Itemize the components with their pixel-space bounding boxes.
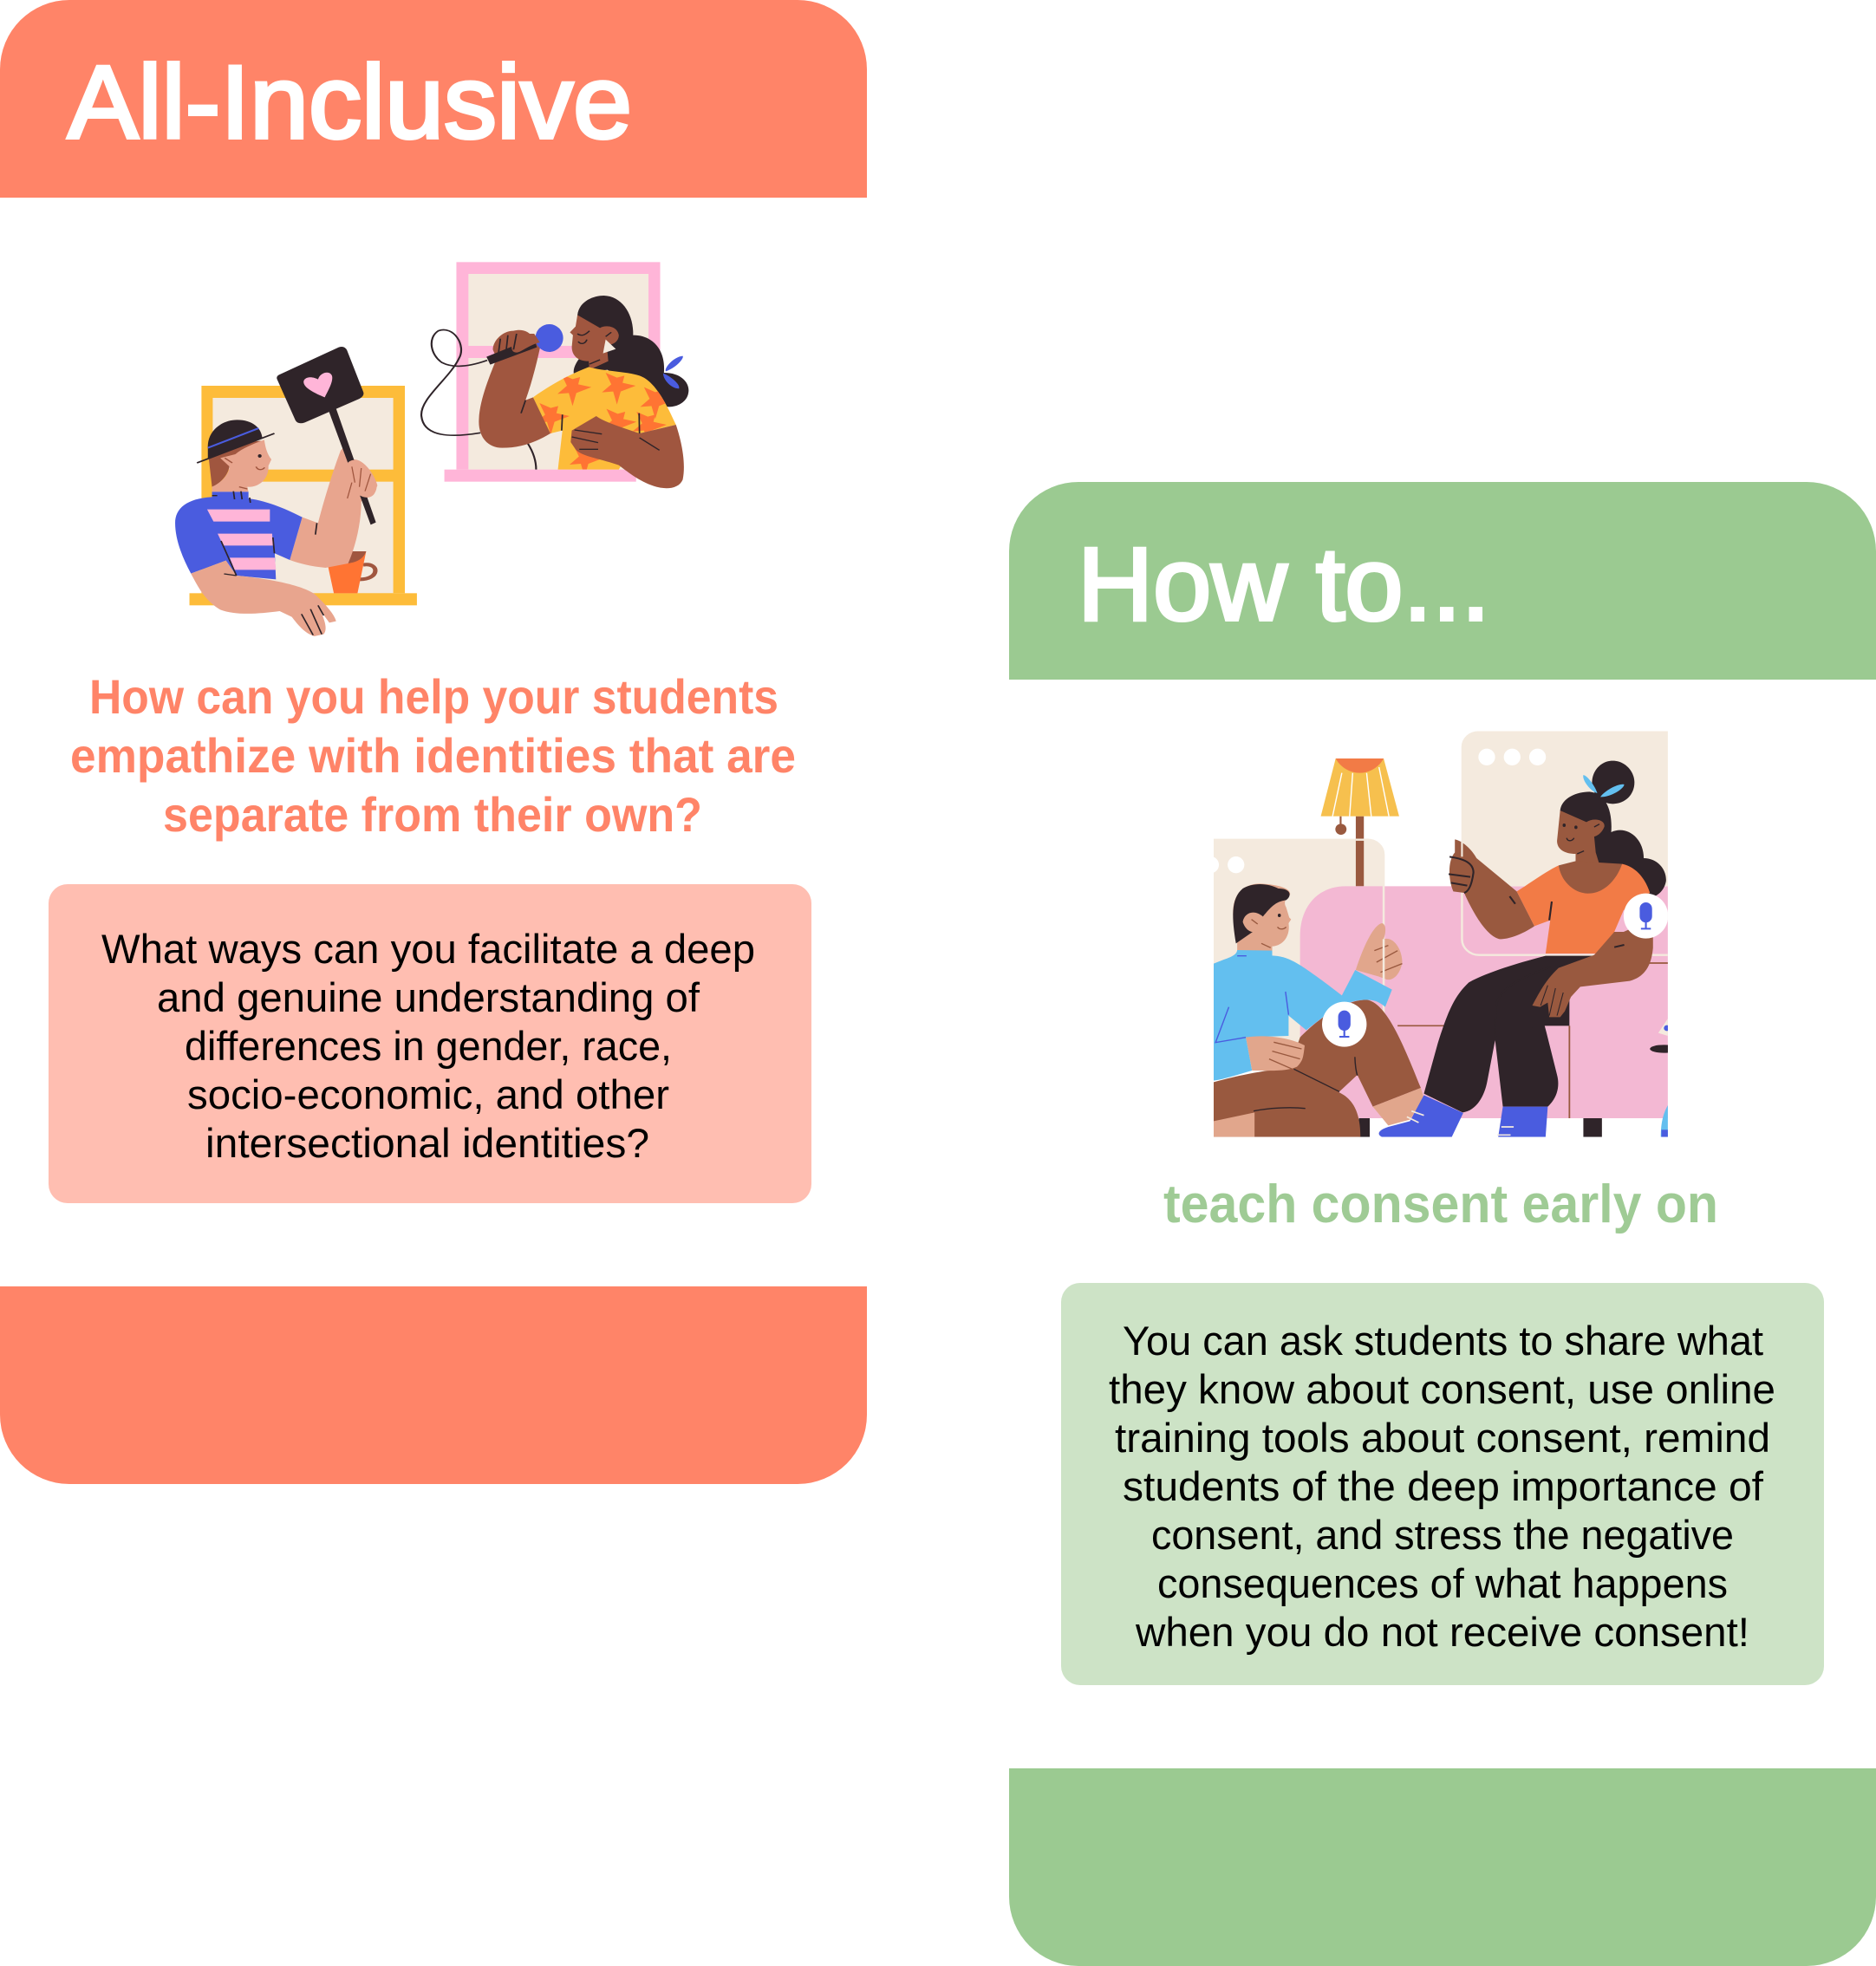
callout: how-to advice: You can ask students to share what: [1123, 1318, 1763, 1364]
callout: how-to advice: they know about consent, use online: [1109, 1366, 1775, 1412]
header banner: How to...: [1009, 482, 1876, 680]
floor lamp: [1321, 758, 1399, 886]
callout: how-to advice: students of the deep importance of: [1123, 1463, 1764, 1509]
callout: discussion prompt: [49, 884, 811, 1203]
coffee cup: [325, 551, 375, 593]
callout: how-to advice: when you do not receive consent!: [1135, 1609, 1749, 1655]
callout: how-to advice: [1061, 1283, 1824, 1685]
mic badge left: [1322, 1002, 1366, 1047]
right video card: [1462, 731, 1668, 955]
woman in orange top: [1379, 761, 1666, 1137]
callout: discussion prompt: differences in gender, race,: [185, 1023, 672, 1069]
pink window: [445, 262, 661, 482]
woman singing into microphone: [421, 296, 688, 488]
question heading: [70, 669, 796, 842]
left card outline and dots: [1214, 839, 1385, 1013]
panel: How to...: [1009, 482, 1876, 1966]
footer banner: [1009, 1768, 1876, 1966]
callout: how-to advice: consent, and stress the negative: [1151, 1512, 1734, 1558]
header banner: How to...: How to...: [1078, 526, 1490, 642]
callout: discussion prompt: socio-economic, and other: [187, 1071, 669, 1117]
illustration: video call on a sofa: [1202, 731, 1677, 1137]
header banner: All-Inclusive: [0, 0, 867, 198]
callout: how-to advice: consequences of what happens: [1157, 1560, 1728, 1606]
callout: how-to advice: training tools about consent, remind: [1115, 1415, 1770, 1461]
panel: All-Inclusive: [0, 0, 867, 1484]
question heading: empathize with identities that are: [70, 728, 796, 783]
callout: discussion prompt: and genuine understanding of: [157, 974, 700, 1020]
shirt stars: [539, 373, 666, 470]
illustration: neighbours at windows with heart sign and microphone: [175, 262, 688, 636]
sofa: [1300, 886, 1668, 1137]
yellow window: [190, 386, 417, 605]
footer banner: [0, 1286, 867, 1484]
side table fragment: [1650, 1019, 1668, 1137]
callout: discussion prompt: intersectional identities?: [205, 1120, 649, 1166]
left video card: [1214, 839, 1384, 1062]
heading: teach consent early on: teach consent early on: [1163, 1175, 1718, 1234]
header banner: All-Inclusive: All-Inclusive: [68, 44, 632, 160]
man with heart sign: [175, 347, 377, 636]
mic badge right: [1624, 894, 1668, 939]
question heading: How can you help your students: [89, 669, 778, 724]
question heading: separate from their own?: [163, 787, 702, 842]
man in blue sweater: [1214, 883, 1423, 1137]
callout: discussion prompt: What ways can you facilitate a deep: [101, 926, 755, 972]
